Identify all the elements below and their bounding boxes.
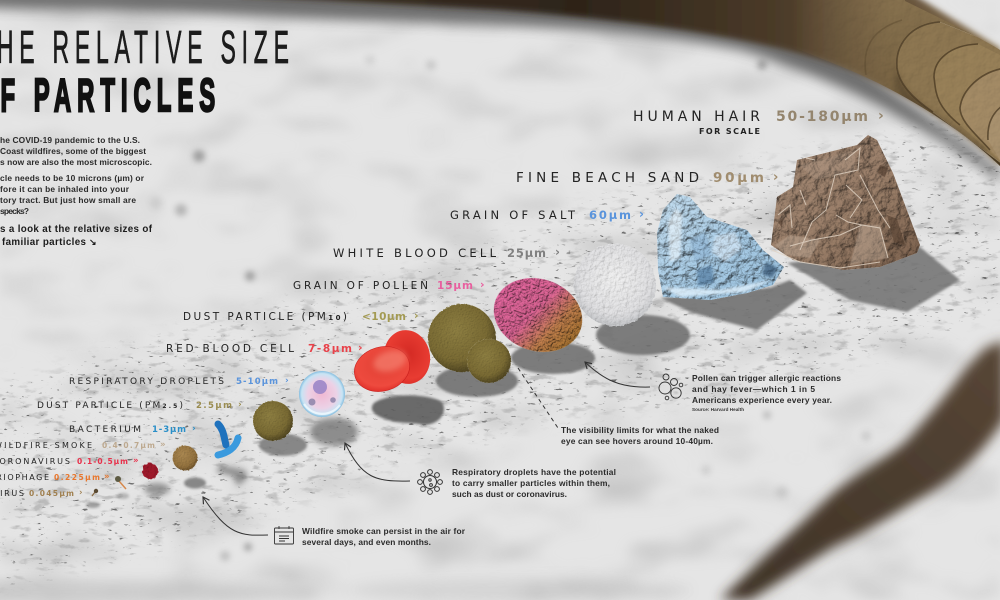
dashed line <box>518 368 558 428</box>
wildfire text <box>302 526 466 547</box>
arrow to droplet <box>345 443 410 481</box>
label: grain of pollen <box>293 278 485 292</box>
pollen text: Pollen can trigger allergic reactions <box>692 373 841 383</box>
label: dust particle PM10: DUST PARTICLE (PM 10) <box>183 311 347 323</box>
label: bacterium: 1-3µm <box>152 425 186 435</box>
label: wildfire smoke <box>0 440 166 450</box>
pollen text <box>692 373 841 412</box>
particle: grain of pollen <box>484 267 592 363</box>
label: human hair: 50-180µm <box>776 109 868 125</box>
label: white blood cell: WHITE BLOOD CELL <box>333 246 497 260</box>
label: dust particle PM2.5 <box>37 400 242 411</box>
visibility text <box>561 425 719 446</box>
label: grain of pollen: GRAIN OF POLLEN <box>293 280 428 292</box>
label: bacteriophage <box>0 472 110 482</box>
wildfire text: Wildfire smoke can persist in the air for <box>302 526 466 536</box>
intro text: fore it can be inhaled into your <box>0 184 130 194</box>
particle: fine beach sand <box>771 135 920 270</box>
label: respiratory droplets: RESPIRATORY DROPLETS <box>69 377 224 387</box>
label: bacteriophage: 0.225µm <box>54 473 100 482</box>
human hair strand, blurred lower right <box>720 340 1000 600</box>
label: dust particle PM10: › <box>414 309 419 322</box>
intro text: Coast wildfires, some of the biggest <box>0 146 146 156</box>
intro text: s a look at the relative sizes of <box>0 224 153 235</box>
label: white blood cell: 25µm <box>507 246 546 260</box>
label: bacterium: › <box>192 424 196 434</box>
label: human hair: HUMAN HAIR <box>633 109 760 125</box>
label: virus <box>0 488 83 498</box>
label: virus: › <box>79 488 83 498</box>
label: human hair <box>633 108 884 136</box>
label: respiratory droplets: › <box>285 376 289 386</box>
label: red blood cell: › <box>358 341 363 354</box>
label: human hair: FOR SCALE <box>699 127 760 136</box>
label: bacteriophage: » <box>104 472 110 482</box>
particle: bacterium <box>218 424 238 455</box>
pollen text: and hay fever—which 1 in 5 <box>692 384 815 394</box>
particle: virus <box>92 489 98 496</box>
intro text: cle needs to be 10 microns (µm) or <box>0 173 145 183</box>
label: dust particle PM10 <box>183 309 419 323</box>
callout: wildfire smoke <box>203 497 466 547</box>
particle: dust PM10 <box>428 304 511 383</box>
label: human hair: › <box>878 108 884 124</box>
label: wildfire smoke: » <box>160 440 166 450</box>
visibility text: eye can see hovers around 10-40µm. <box>561 436 713 446</box>
intro text: familiar particles <box>2 237 87 248</box>
label: dust particle PM2.5: › <box>238 400 242 410</box>
intro text: s now are also the most microscopic. <box>0 157 152 167</box>
intro text <box>0 135 153 248</box>
label: grain of salt: 60µm <box>589 208 631 222</box>
human hair strand, top arc <box>0 0 1000 182</box>
label: fine beach sand: › <box>773 170 778 185</box>
particle: grain of salt <box>657 194 784 300</box>
arrow to pollen <box>585 362 650 387</box>
label: grain of salt <box>450 207 644 222</box>
respiratory text: Respiratory droplets have the potential <box>452 467 616 477</box>
label: grain of salt: › <box>639 207 644 221</box>
label: red blood cell: RED BLOOD CELL <box>166 343 294 355</box>
intro text: ↘ <box>89 237 97 247</box>
callout: respiratory droplets <box>345 443 616 499</box>
label: coronavirus: 0.1-0.5µm <box>77 457 128 466</box>
callout: visibility limit <box>518 368 719 446</box>
label: respiratory droplets <box>69 376 289 387</box>
particle: red blood cells <box>349 326 434 398</box>
label: fine beach sand <box>516 170 778 186</box>
label: dust particle PM2.5: 2.5µm <box>196 401 232 411</box>
particle: bacteriophage <box>115 476 126 489</box>
label: coronavirus <box>0 456 138 466</box>
intro text: specks? <box>0 206 29 216</box>
label: grain of pollen: › <box>480 278 485 291</box>
particle: coronavirus <box>142 463 158 479</box>
label: bacterium <box>69 424 196 435</box>
callout: pollen allergies <box>585 362 841 412</box>
particle: respiratory droplet <box>299 371 345 417</box>
particle: wildfire smoke <box>172 446 198 470</box>
particle: dust PM2.5 <box>253 401 293 441</box>
label: fine beach sand: 90µm <box>713 170 764 186</box>
particle: white blood cell <box>574 244 656 326</box>
label: red blood cell: 7-8µm <box>308 343 352 355</box>
label: wildfire smoke: 0.4-0.7µm <box>102 441 155 450</box>
label: grain of pollen: 15µm <box>437 280 473 292</box>
intro text: tory tract. But just how small are <box>0 195 136 205</box>
label: grain of salt: GRAIN OF SALT <box>450 208 576 222</box>
label: red blood cell <box>166 341 363 355</box>
pollen text: Americans experience every year. <box>692 395 832 405</box>
shadows under particles <box>86 247 960 508</box>
label: respiratory droplets: 5-10µm <box>236 377 278 387</box>
wildfire text: several days, and even months. <box>302 537 431 547</box>
intro text: he COVID-19 pandemic to the U.S. <box>0 135 140 145</box>
visibility text: The visibility limits for what the naked <box>561 425 719 435</box>
label: coronavirus: » <box>133 456 138 466</box>
label: dust particle PM10: <10µm <box>362 311 406 323</box>
label: bacterium: BACTERIUM <box>69 425 141 435</box>
icon: calendar <box>274 526 294 544</box>
icon: bubbles <box>659 374 683 400</box>
arrow to smoke <box>203 497 268 535</box>
label: virus: 0.045µm <box>29 489 74 498</box>
respiratory text: to carry smaller particles within them, <box>452 478 610 488</box>
label: fine beach sand: FINE BEACH SAND <box>516 170 699 186</box>
label: white blood cell: › <box>555 245 560 259</box>
title <box>0 21 289 121</box>
label: dust particle PM2.5: DUST PARTICLE (PM 2.5) <box>37 401 183 411</box>
icon: virus <box>418 470 442 494</box>
respiratory text <box>452 467 616 499</box>
label: white blood cell <box>333 245 560 260</box>
pollen text: Source: Harvard Health <box>692 407 744 412</box>
respiratory text: such as dust or coronavirus. <box>452 489 567 499</box>
